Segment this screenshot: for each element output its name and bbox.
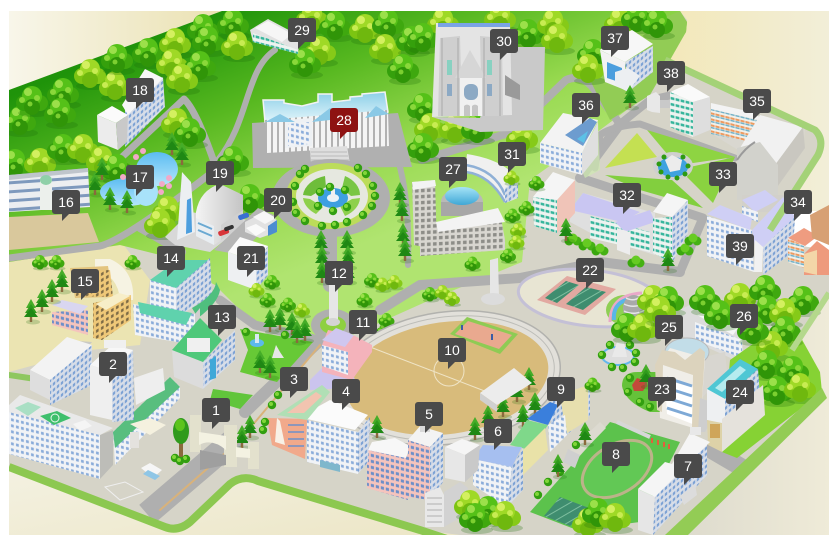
bushes along main road [235, 391, 282, 450]
building 5 and annexes [367, 424, 480, 527]
marker 37 [601, 26, 629, 57]
marker 33: 33 [715, 166, 731, 182]
building 19 tower and hall [165, 172, 250, 252]
marker 28 highlighted: 28 [336, 112, 352, 128]
marker 33 [709, 162, 737, 193]
landscaping trees centre [248, 273, 461, 332]
building 2 tower with wing [30, 337, 180, 465]
building 27 with dome [412, 180, 505, 256]
marker 3 [280, 367, 308, 398]
roads [9, 50, 746, 514]
marker 20 [264, 188, 292, 219]
marker 36: 36 [578, 97, 594, 113]
garden with fountain near 13 [210, 307, 314, 409]
marker 21: 21 [243, 250, 259, 266]
building 3 [267, 385, 330, 459]
building 30 cathedral [432, 23, 545, 132]
marker 32: 32 [619, 187, 635, 203]
marker 26: 26 [736, 308, 752, 324]
trees around 25 and 26 [611, 275, 821, 407]
marker 11 [349, 310, 377, 341]
marker 30: 30 [496, 33, 512, 49]
lower bushes [454, 490, 633, 539]
marker 39: 39 [732, 238, 748, 254]
marker 2: 2 [109, 356, 117, 372]
marker 38: 38 [663, 65, 679, 81]
lawn behind building 24 [722, 340, 822, 458]
marker 35 [743, 89, 771, 120]
far forest belt [0, 3, 675, 240]
parking lot and entrance canopy [105, 418, 166, 500]
parking and cars near 20 [214, 208, 276, 255]
building 35 complex [670, 84, 805, 186]
building 32 [464, 170, 702, 274]
marker 10: 10 [444, 342, 460, 358]
marker 9: 9 [557, 381, 565, 397]
marker 38 [657, 61, 685, 92]
marker 37: 37 [607, 30, 623, 46]
marker 6: 6 [494, 423, 502, 439]
tennis courts 22 and oval [517, 268, 649, 328]
marker 12: 12 [331, 265, 347, 281]
building 20 [245, 211, 277, 238]
marker 25: 25 [661, 319, 677, 335]
marker 18 [126, 78, 154, 109]
conifers by field [370, 367, 544, 442]
marker 7: 7 [684, 458, 692, 474]
building 16 and sports ground [9, 168, 99, 250]
building 28 main hall and plaza [252, 92, 412, 168]
marker 13 [208, 305, 236, 336]
building 6 [473, 445, 523, 507]
marker 29: 29 [294, 22, 310, 38]
marker 1: 1 [212, 402, 220, 418]
marker 14 [157, 246, 185, 277]
marker 22 [576, 258, 604, 289]
marker 25 [655, 315, 683, 346]
marker 7 [674, 454, 702, 485]
building 7 [638, 427, 710, 535]
block beside 13 [133, 302, 200, 345]
marker 26 [730, 304, 758, 335]
monument tower [481, 258, 505, 305]
marker 6 [484, 419, 512, 450]
marker 34 [784, 190, 812, 221]
building 4 [307, 400, 370, 474]
building 37 [600, 30, 653, 110]
marker 9 [547, 377, 575, 408]
marker 4: 4 [342, 383, 350, 399]
marker 13: 13 [214, 309, 230, 325]
buildings 23 and 25 [655, 338, 727, 432]
buildings 39 and 34 [707, 190, 829, 275]
building 31 [465, 154, 518, 203]
stand shelter by field [480, 368, 532, 412]
marker 28 highlighted [330, 108, 358, 139]
building 14 [150, 258, 220, 318]
building 15 and neighbours [24, 255, 142, 340]
circular plaza and fountain [272, 159, 414, 286]
marker 5 [415, 402, 443, 433]
marker 17 [126, 165, 154, 196]
lawn behind building 37 [590, 11, 687, 120]
building 38 [647, 92, 670, 113]
marker 4 [332, 379, 360, 410]
building 18 [97, 69, 165, 150]
building 24 [707, 359, 765, 452]
marker 30 [490, 29, 518, 60]
marker 17: 17 [132, 169, 148, 185]
marker 15 [71, 269, 99, 300]
marker 21 [237, 246, 265, 277]
marker 2 [99, 352, 127, 383]
marker 11: 11 [356, 314, 370, 330]
marker 34: 34 [790, 194, 806, 210]
tower 12 on roundabout [311, 285, 352, 337]
building 29 [250, 19, 300, 54]
marker 3: 3 [290, 371, 298, 387]
buildings 11 [310, 328, 372, 390]
building 36 [540, 113, 600, 178]
marker 1 [202, 398, 230, 429]
fountain near 25 [598, 341, 640, 372]
marker 31: 31 [504, 146, 520, 162]
marker 23 [648, 377, 676, 408]
marker 39 [726, 234, 754, 265]
marker 27: 27 [445, 161, 461, 177]
hospital main building [9, 395, 113, 479]
marker 10 [438, 338, 466, 369]
building 26 [680, 302, 743, 360]
marker 23: 23 [654, 381, 670, 397]
building 13 [172, 318, 235, 389]
marker 27 [439, 157, 467, 188]
marker 19: 19 [212, 165, 228, 181]
marker 24: 24 [732, 384, 748, 400]
marker 22: 22 [582, 262, 598, 278]
plaza garden 33 [605, 130, 735, 208]
marker 19 [206, 161, 234, 192]
marker 29 [288, 18, 316, 49]
garden and gazebo near 23 [622, 364, 660, 412]
marker 8: 8 [612, 446, 620, 462]
marker 35: 35 [749, 93, 765, 109]
marker 16: 16 [58, 194, 74, 210]
marker 36 [572, 93, 600, 124]
marker 15: 15 [77, 273, 93, 289]
marker 5: 5 [425, 406, 433, 422]
marker 31 [498, 142, 526, 173]
building 9 [510, 378, 602, 475]
marker 20: 20 [270, 192, 286, 208]
gate 1 and big tree [171, 415, 259, 470]
marker 16 [52, 190, 80, 221]
marker 24 [726, 380, 754, 411]
marker 32 [613, 183, 641, 214]
marker 14: 14 [163, 250, 179, 266]
athletic field 10 [338, 310, 561, 446]
marker 12 [325, 261, 353, 292]
marker 18: 18 [132, 82, 148, 98]
marker 8 [602, 442, 630, 473]
building 21 [228, 237, 268, 290]
sports ground 8 [530, 422, 680, 530]
pond 17 with flowers [100, 148, 178, 216]
